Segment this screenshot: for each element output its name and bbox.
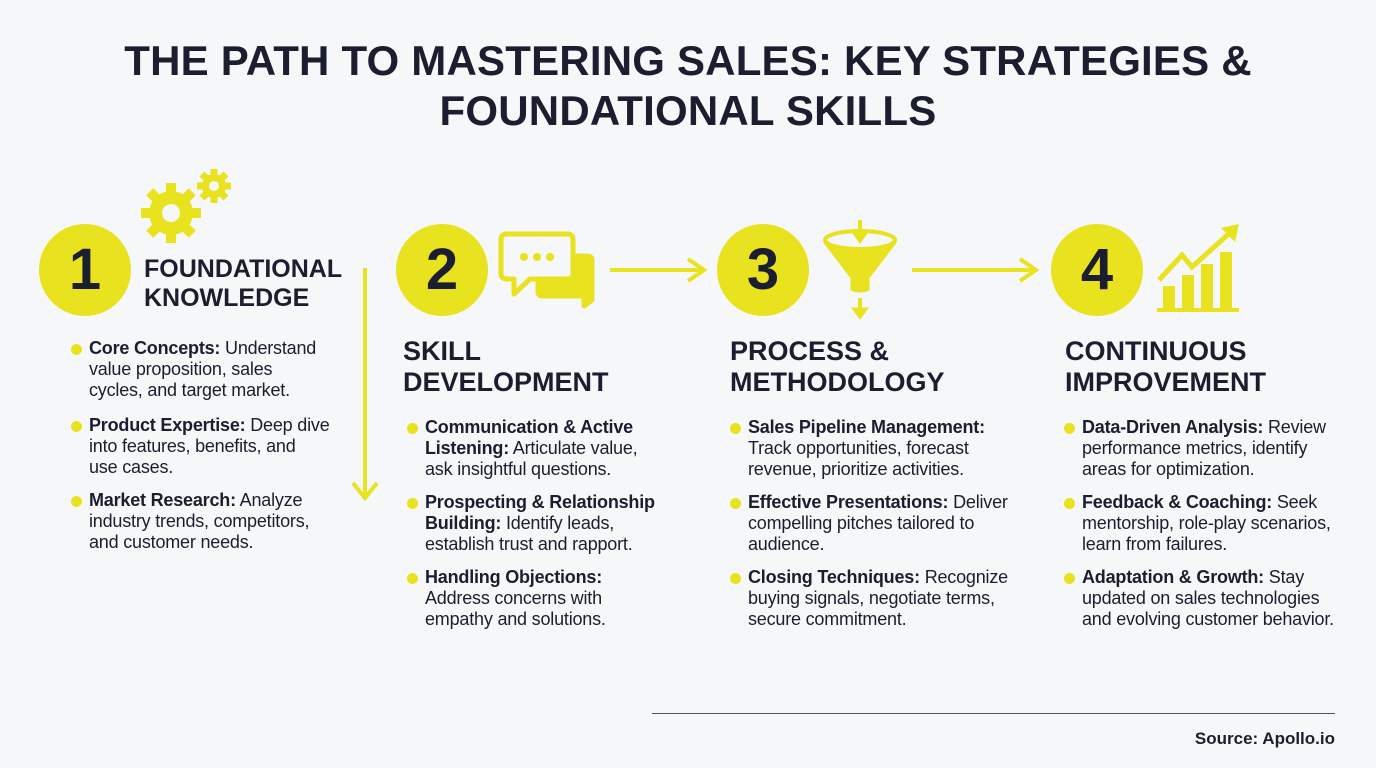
heading: foundational knowledge: FOUNDATIONAL <box>144 255 342 283</box>
icon: funnel <box>823 220 897 320</box>
source: Source: Apollo.io <box>1195 729 1335 748</box>
list: process & methodology: Track opportunities, forecast <box>748 438 969 458</box>
icon: chat bubbles <box>498 232 594 308</box>
list: process & methodology: secure commitment. <box>748 609 906 629</box>
step 1 number: 1 <box>69 237 101 302</box>
list: foundational knowledge: Product Expertise: Deep dive <box>89 415 330 435</box>
list: skill development: Handling Objections: <box>425 567 602 587</box>
step 4 number: 4 <box>1081 237 1113 302</box>
list: continuous improvement: performance metrics, identify <box>1082 438 1307 458</box>
heading: foundational knowledge: KNOWLEDGE <box>144 284 309 312</box>
step 3 number <box>717 224 809 316</box>
title <box>124 37 1252 134</box>
list: skill development: Building: Identify leads, <box>425 513 614 533</box>
list: skill development: Communication & Active <box>425 417 633 437</box>
list: continuous improvement: updated on sales technologies <box>1082 588 1319 608</box>
list: process & methodology: Closing Techniques: Recognize <box>748 567 1008 587</box>
list: foundational knowledge: into features, benefits, and <box>89 436 296 456</box>
arrow: 2 to 3 <box>610 257 708 283</box>
list: process & methodology: revenue, prioritize activities. <box>748 459 964 479</box>
step 2 number <box>396 224 488 316</box>
list: foundational knowledge: cycles, and target market. <box>89 380 290 400</box>
list: foundational knowledge <box>71 338 330 552</box>
list: continuous improvement: Feedback & Coaching: Seek <box>1082 492 1317 512</box>
list: process & methodology: compelling pitches tailored to <box>748 513 974 533</box>
list: skill development: empathy and solutions. <box>425 609 606 629</box>
list: skill development: ask insightful questions. <box>425 459 611 479</box>
arrow: vertical down <box>352 268 378 502</box>
list: continuous improvement: mentorship, role-play scenarios, <box>1082 513 1331 533</box>
step 2 number: 2 <box>426 237 458 302</box>
step 4 number <box>1051 224 1143 316</box>
list: continuous improvement: Adaptation & Growth: Stay <box>1082 567 1304 587</box>
heading: continuous improvement <box>1065 336 1266 397</box>
list: continuous improvement: and evolving customer behavior. <box>1082 609 1334 629</box>
list: continuous improvement: areas for optimization. <box>1082 459 1254 479</box>
heading: skill development: SKILL <box>403 336 481 366</box>
heading: continuous improvement: IMPROVEMENT <box>1065 367 1266 397</box>
icon: gears <box>141 169 231 243</box>
list: skill development: Prospecting & Relationship <box>425 492 655 512</box>
list: foundational knowledge: industry trends, competitors, <box>89 511 309 531</box>
list: skill development: Listening: Articulate value, <box>425 438 637 458</box>
list: process & methodology: Effective Presentations: Deliver <box>748 492 1008 512</box>
list: foundational knowledge: Market Research: Analyze <box>89 490 302 510</box>
title: THE PATH TO MASTERING SALES: KEY STRATEGIES & <box>124 37 1252 84</box>
icon: growth chart <box>1157 224 1239 312</box>
step 1 number <box>39 224 131 316</box>
heading: skill development <box>403 336 609 397</box>
list: process & methodology: audience. <box>748 534 824 554</box>
list: process & methodology: Sales Pipeline Management: <box>748 417 985 437</box>
arrow: 3 to 4 <box>912 257 1040 283</box>
list: continuous improvement: learn from failures. <box>1082 534 1227 554</box>
list: continuous improvement <box>1064 417 1334 629</box>
list: skill development: establish trust and rapport. <box>425 534 633 554</box>
title: FOUNDATIONAL SKILLS <box>440 87 936 134</box>
step 3 number: 3 <box>747 237 779 302</box>
list: foundational knowledge: and customer needs. <box>89 532 253 552</box>
list: foundational knowledge: value proposition, sales <box>89 359 272 379</box>
list: process & methodology: buying signals, negotiate terms, <box>748 588 995 608</box>
heading: foundational knowledge <box>144 255 342 312</box>
heading: process & methodology <box>730 336 944 397</box>
list: process & methodology <box>730 417 1008 629</box>
list: foundational knowledge: use cases. <box>89 457 173 477</box>
list: foundational knowledge: Core Concepts: Understand <box>89 338 316 358</box>
heading: continuous improvement: CONTINUOUS <box>1065 336 1246 366</box>
list: skill development <box>407 417 655 629</box>
list: skill development: Address concerns with <box>425 588 602 608</box>
heading: process & methodology: METHODOLOGY <box>730 367 944 397</box>
list: continuous improvement: Data-Driven Analysis: Review <box>1082 417 1326 437</box>
heading: process & methodology: PROCESS & <box>730 336 889 366</box>
heading: skill development: DEVELOPMENT <box>403 367 609 397</box>
